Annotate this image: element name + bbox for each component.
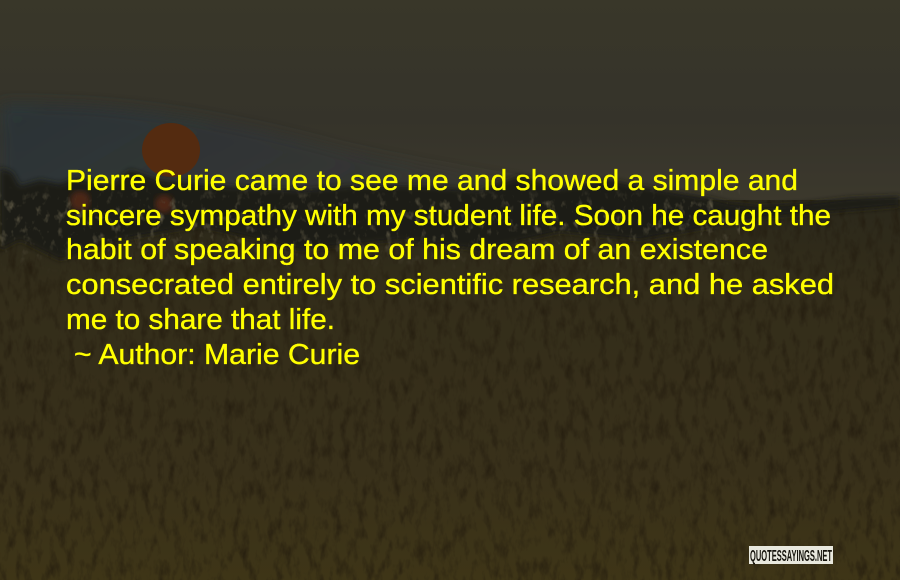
quote text — [66, 165, 834, 371]
quote line 1: Pierre Curie came to see me and showed a simple and — [66, 165, 798, 197]
background: orange balloon — [142, 123, 200, 177]
quote line 5: me to share that life. — [66, 304, 335, 336]
background: wheat field — [0, 200, 900, 580]
quote line 2: sincere sympathy with my student life. Soon he caught the — [66, 200, 831, 232]
quote line 4: consecrated entirely to scientific research, and he asked — [66, 269, 834, 301]
background: evening sky — [0, 0, 900, 240]
watermark — [749, 546, 833, 565]
background: dark treeline and figures — [0, 168, 900, 275]
quote line 3: habit of speaking to me of his dream of an existence — [66, 234, 768, 266]
author attribution: ~ Author: Marie Curie — [74, 339, 360, 371]
